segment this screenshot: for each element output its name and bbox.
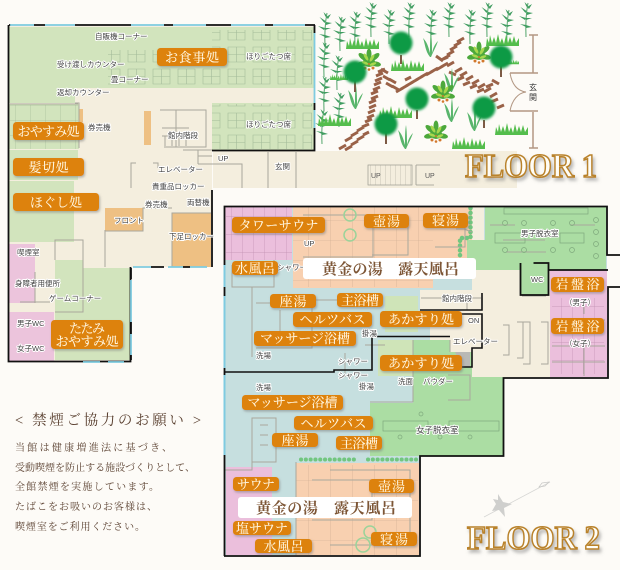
- label: pot bath 2: 壺湯: [378, 479, 405, 494]
- label: scrub room 2: あかすり処: [388, 356, 454, 371]
- label: entrance: [529, 82, 537, 102]
- notice body: 当館は健康増進法に基づき、: [15, 441, 172, 454]
- banner: women's open-air bath: 黄金の湯 露天風呂: [256, 499, 396, 517]
- small labels: floor 1: 玄関: [275, 161, 290, 171]
- small labels: floor 2: 館内階段: [442, 293, 472, 303]
- green pebble borders: [301, 208, 470, 460]
- small labels: floor 2: 男子脱衣室: [521, 228, 559, 238]
- small labels: floor 2: UP: [304, 239, 314, 248]
- label: sauna: サウナ: [237, 477, 275, 492]
- hallway stairs: [368, 165, 440, 185]
- label: cold bath: 水風呂: [235, 261, 275, 276]
- interior walls and stairs: [10, 103, 296, 312]
- entrance door: [510, 35, 538, 148]
- inner black walls: [224, 293, 482, 372]
- outer wall: [224, 206, 620, 556]
- small labels: floor 2: ON: [468, 316, 479, 325]
- label: sitting bath 2: 座湯: [282, 433, 308, 448]
- small labels: floor 1: 喫煙室: [17, 247, 40, 257]
- small labels: floor 1: 男子WC: [17, 319, 45, 328]
- label: pot bath 2: [369, 479, 414, 494]
- small labels: floor 1: エレベーター: [158, 165, 203, 174]
- banner: men's open-air bath: [303, 258, 476, 279]
- small labels: floor 2: シャワー: [338, 357, 368, 366]
- small labels: floor 2: パウダー: [423, 376, 453, 386]
- small labels: floor 1: 女子WC: [17, 343, 45, 353]
- label: dining: お食事処: [165, 50, 219, 65]
- interior walls and fixtures: [225, 215, 605, 555]
- outer wall: [8, 25, 315, 362]
- WC room: [520, 263, 548, 295]
- label: rest area: おやすみ処: [18, 124, 80, 139]
- shrubs: [357, 42, 491, 143]
- bamboo: [315, 2, 533, 144]
- green steam circles: [344, 209, 376, 552]
- label: sleeping bath: 寝湯: [432, 213, 459, 228]
- small labels: floor 1: 券売機: [88, 122, 111, 132]
- small labels: floor 1: 貴重品ロッカー: [152, 181, 204, 191]
- label: entrance: 関: [529, 93, 537, 102]
- small labels: floor 1: [15, 31, 291, 353]
- heading: FLOOR 2: FLOOR 2: [467, 520, 600, 557]
- cream floor: [9, 26, 517, 361]
- hallway stairs: UP: [371, 173, 381, 180]
- notice body: 喫煙室をご利用ください。: [15, 520, 145, 533]
- small labels: floor 2: （男子）: [565, 298, 595, 307]
- small labels: floor 2: 洗面: [398, 376, 413, 386]
- label: massage: ほぐし処: [30, 195, 82, 210]
- label: tower sauna: タワーサウナ: [238, 218, 318, 233]
- notice heading: < 禁煙ご協力のお願い >: [15, 411, 201, 429]
- small labels: floor 2: 掛湯: [359, 381, 374, 391]
- label: salt sauna: 塩サウナ: [236, 521, 288, 536]
- label: entrance: 玄: [529, 82, 537, 92]
- tables: [10, 30, 312, 149]
- label: massage bath 1: マッサージ浴槽: [260, 331, 350, 346]
- label: cold bath 2: 水風呂: [264, 539, 304, 554]
- label: scrub room 1: あかすり処: [388, 312, 454, 327]
- label: stone bath men: 岩盤浴: [556, 277, 600, 292]
- text block: no smoking notice: [15, 411, 201, 533]
- hallway stairs: UP: [425, 173, 435, 180]
- tall grass tufts: [348, 33, 482, 149]
- small labels: floor 1: 畳コーナー: [111, 75, 148, 84]
- grass clumps: [318, 34, 528, 149]
- men's changing room lockers: [383, 208, 598, 439]
- small labels: floor 1: フロント: [114, 216, 144, 225]
- label: massage: [13, 193, 99, 211]
- windows: [10, 25, 314, 362]
- label: tatami rest area: たたみ: [69, 321, 105, 336]
- label: pot bath: [364, 214, 409, 229]
- label: barber: 髪切処: [28, 160, 68, 175]
- label: sitting bath: 座湯: [280, 294, 306, 309]
- label: sleeping bath 2: [371, 532, 417, 547]
- label: barber: [13, 158, 84, 176]
- label: main bath: 主浴槽: [341, 293, 379, 308]
- notice body: [15, 441, 195, 533]
- small labels: floor 2: WC: [531, 275, 544, 284]
- label: main bath 2: 主浴槽: [340, 436, 378, 451]
- label: massage bath 2: マッサージ浴槽: [248, 395, 338, 410]
- notice body: たばこをお吸いのお客様は、: [15, 500, 157, 513]
- heading: FLOOR 1: FLOOR 1: [465, 148, 597, 185]
- small labels: floor 2: [256, 228, 595, 435]
- small labels: floor 1: ゲームコーナー: [49, 294, 101, 303]
- label: sitting bath 2: [272, 433, 318, 448]
- panel: floor 1 plan: [8, 25, 517, 362]
- small labels: floor 2: 洗場: [256, 350, 271, 360]
- windows: [224, 265, 226, 455]
- green rooms: [9, 27, 314, 360]
- label: sleeping bath: [423, 213, 468, 228]
- small labels: floor 2: 洗場: [256, 382, 271, 392]
- small labels: floor 2: シャワー: [338, 371, 368, 380]
- floor zones: [225, 207, 607, 555]
- notice body: 全館禁煙を実施しています。: [15, 480, 159, 493]
- banner: men's open-air bath: 黄金の湯 露天風呂: [322, 260, 459, 278]
- label: tatami rest area: [51, 320, 123, 349]
- trees: [344, 32, 512, 144]
- brick path: [339, 38, 504, 150]
- small labels: floor 1: 受け渡しカウンター: [57, 59, 124, 69]
- small labels: floor 1: ほりごたつ席: [246, 51, 291, 61]
- label: dining: [157, 48, 227, 66]
- small labels: floor 1: UP: [218, 154, 228, 163]
- small labels: floor 2: （女子）: [565, 338, 595, 348]
- label: pot bath: 壺湯: [373, 214, 400, 229]
- label: hertz bath: ヘルツバス: [300, 312, 366, 327]
- small labels: floor 2: 女子脱衣室: [416, 425, 459, 435]
- small labels: floor 2: シャワー: [277, 263, 307, 272]
- panel: floor 2 plan: [224, 206, 620, 556]
- small labels: floor 1: 返却カウンター: [57, 87, 110, 97]
- label: hertz bath 2: ヘルツバス: [300, 416, 366, 431]
- small labels: floor 1: 身障者用便所: [15, 278, 60, 288]
- small labels: floor 2: 掛湯: [362, 328, 377, 338]
- icon: shooting star: [484, 482, 550, 517]
- small labels: floor 1: 館内階段: [168, 130, 198, 140]
- small labels: floor 1: 下足ロッカー: [169, 232, 214, 241]
- small labels: floor 1: ほりごたつ席: [246, 119, 291, 129]
- label: tatami rest area: おやすみ処: [56, 334, 118, 349]
- label: stone bath women: 岩盤浴: [556, 319, 600, 334]
- small labels: floor 1: 券売機: [145, 199, 168, 209]
- small labels: floor 1: 自販機コーナー: [95, 31, 148, 41]
- small labels: floor 1: 両替機: [187, 197, 210, 207]
- pink rooms: [9, 244, 54, 361]
- garden: [315, 2, 538, 150]
- banner: women's open-air bath: [238, 497, 412, 518]
- label: sitting bath: [270, 294, 316, 309]
- small labels: floor 2: エレベーター: [453, 337, 498, 346]
- notice body: 受動喫煙を防止する施設づくりとして、: [15, 461, 195, 474]
- orange counters: [79, 109, 211, 267]
- label: sleeping bath 2: 寝湯: [380, 532, 408, 547]
